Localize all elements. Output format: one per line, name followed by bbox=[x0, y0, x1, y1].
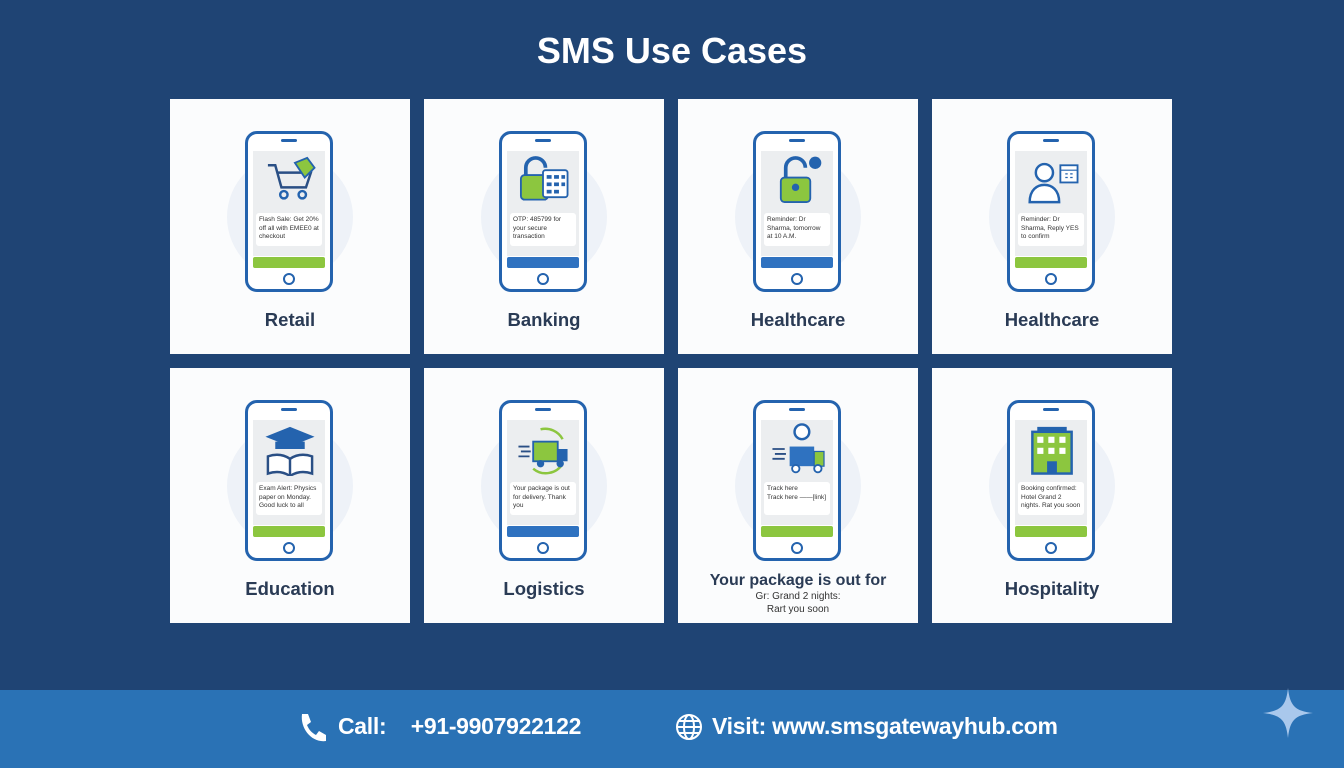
card: package bbox=[678, 368, 918, 623]
label: package text: Your package is out for bbox=[710, 572, 886, 589]
phone: package bbox=[753, 400, 841, 561]
phone: hospitality: Booking confirmed: Hotel Grand 2 nights. Rat you soon bbox=[1021, 485, 1080, 509]
icon: phone bbox=[302, 714, 326, 742]
label: package text: Gr: Grand 2 nights: bbox=[755, 591, 841, 602]
icon: sparkle bbox=[1264, 688, 1312, 738]
icon: doctor calendar bbox=[1028, 162, 1078, 204]
card: healthcare 1: Healthcare bbox=[751, 309, 845, 330]
label: package text: Rart you soon bbox=[767, 604, 829, 615]
phone: healthcare doctor bbox=[1007, 131, 1095, 292]
card: banking bbox=[424, 99, 664, 354]
icon: delivery truck pin bbox=[772, 423, 825, 474]
contact call: Call: +91-9907922122 bbox=[338, 713, 581, 739]
phone: education: Exam Alert: Physics paper on Monday. Good luck to all bbox=[259, 485, 316, 509]
card: hospitality bbox=[932, 368, 1172, 623]
icon: truck with box bbox=[518, 428, 568, 474]
icon: shopping cart bbox=[268, 156, 316, 200]
phone: logistics: Your package is out for delivery. Thank you bbox=[513, 485, 570, 509]
icon: padlock keypad bbox=[520, 156, 568, 200]
phone: retail bbox=[245, 131, 333, 292]
card: healthcare 1 bbox=[678, 99, 918, 354]
card: healthcare 2: Healthcare bbox=[1005, 309, 1099, 330]
label: package text bbox=[710, 572, 886, 615]
phone: education bbox=[245, 400, 333, 561]
card: education bbox=[170, 368, 410, 623]
card: logistics bbox=[424, 368, 664, 623]
card: banking: Banking bbox=[508, 309, 580, 330]
phone: healthcare: Reminder: Dr Sharma, tomorrow at 10 A.M. bbox=[767, 216, 820, 240]
icon: open padlock bbox=[780, 156, 822, 203]
card: healthcare 2 bbox=[932, 99, 1172, 354]
contact website: Visit: www.smsgatewayhub.com bbox=[712, 713, 1058, 739]
card: retail bbox=[170, 99, 410, 354]
phone: package: Track here ——[link] bbox=[767, 494, 826, 500]
icon: graduation cap book bbox=[266, 426, 314, 476]
card: education: Education bbox=[245, 578, 335, 599]
icon: globe bbox=[676, 714, 702, 740]
footer bbox=[0, 690, 1344, 768]
card: retail: Retail bbox=[265, 309, 315, 330]
phone: package: Track here bbox=[767, 485, 798, 492]
card: logistics: Logistics bbox=[503, 578, 585, 599]
icon: hotel building bbox=[1031, 426, 1073, 475]
phone: banking bbox=[499, 131, 587, 292]
phone: healthcare bbox=[753, 131, 841, 292]
phone: healthcare doctor: Reminder: Dr Sharma, Reply YES to confirm bbox=[1021, 216, 1079, 240]
phone: hospitality bbox=[1007, 400, 1095, 561]
phone: banking: OTP: 485799 for your secure transaction bbox=[513, 216, 561, 240]
phone: logistics bbox=[499, 400, 587, 561]
card: hospitality: Hospitality bbox=[1005, 578, 1099, 599]
title: SMS Use Cases bbox=[537, 30, 807, 71]
phone: retail: Flash Sale: Get 20% off all with EMEE0 at checkout bbox=[259, 216, 319, 240]
